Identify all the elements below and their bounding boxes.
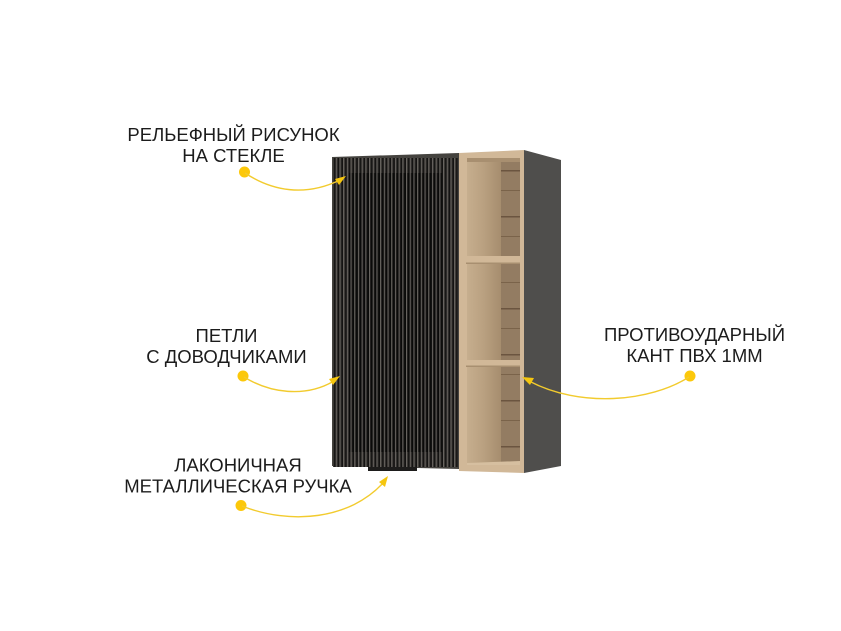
label: hinges: ПЕТЛИ: [196, 325, 257, 346]
label: relief pattern on glass: [127, 124, 340, 166]
open shelving frame: [459, 150, 524, 473]
callout arrow: metal handle: [236, 476, 388, 517]
label: metal handle: МЕТАЛЛИЧЕСКАЯ РУЧКА: [124, 476, 352, 496]
label: PVC edge: КАНТ ПВХ 1ММ: [626, 345, 763, 366]
callout arrow: PVC edge: [522, 370, 696, 399]
label: PVC edge: [604, 324, 785, 366]
label: hinges: [146, 325, 307, 367]
callout arrow: relief pattern: [239, 166, 346, 190]
side panel: [524, 150, 561, 473]
label: relief pattern on glass: НА СТЕКЛЕ: [182, 145, 285, 166]
label: hinges: С ДОВОДЧИКАМИ: [146, 346, 307, 367]
label: metal handle: [124, 454, 352, 496]
callout arrow: hinges: [238, 370, 340, 392]
label: metal handle: ЛАКОНИЧНАЯ: [174, 454, 302, 476]
label: relief pattern on glass: РЕЛЬЕФНЫЙ РИСУНОК: [127, 124, 340, 145]
label: PVC edge: ПРОТИВОУДАРНЫЙ: [604, 324, 785, 345]
metal handle: [368, 467, 417, 471]
cabinet: [332, 150, 561, 473]
ribbed glass door: [332, 153, 459, 469]
